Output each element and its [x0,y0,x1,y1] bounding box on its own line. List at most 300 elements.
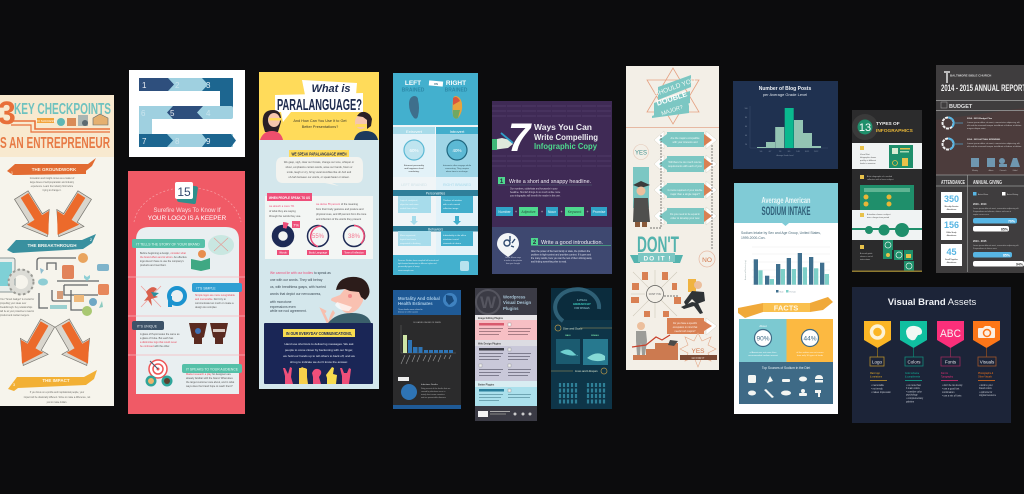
asset: fonts: • use a mix of fonts [942,394,962,398]
lower section: good introduction: than you thought [506,262,521,265]
histogram: 8-9 [788,151,790,153]
column: introvert: Introvert [450,129,465,134]
text: budget: magna aliqua enim [967,128,986,130]
lower section: good introduction: problem is high-context and provides context. If it goes and [531,254,592,256]
question boxes [654,131,717,225]
icons: ministries [971,158,1020,172]
panel: key checkpoints as an entrepreneur [0,95,114,406]
title: key checkpoints: S AN ENTREPRENEUR [0,135,110,152]
asset: colors: & compliments [905,376,921,378]
column labels: RIGHT BRAINED [443,183,471,187]
section: story of your brand: IT TELLS THE STORY OF YOUR BRAND [136,242,200,246]
text block: impact [24,391,91,404]
text block: groundwork: experience. Learn the industry first before [31,185,74,188]
donut: 55% [307,226,329,255]
title [941,71,1024,93]
annual giving bars: 2014 - 2015 [973,240,987,243]
section 2: A list infographic of a ranked [867,175,892,178]
title: BRAINED [445,88,468,94]
donut: 38%: Tone of Inflection [344,251,364,255]
bar chart: sodium intake [744,247,830,293]
question boxes: Do you need to be equal in [670,213,701,216]
asset: fonts: Font & [941,372,948,375]
asset: fonts [937,321,964,398]
fact: 90%: About [759,324,767,328]
text block: breakthrough: will be at your proactive to lead to [0,310,35,313]
lower section: good introduction: 2 [533,240,537,246]
step labels: 9 [206,137,211,146]
stat cards: Worship Service [944,206,959,208]
text block: we cannot lie with our bodies: us, with breathless gasps, with hurried [270,285,326,289]
histogram: 20 [745,144,747,146]
histogram: 40 [745,135,747,137]
title: VS [434,82,438,86]
title [759,86,811,97]
panel: in our everyday communications [264,323,373,384]
annual giving bars: 2013 - 2014 [973,203,987,206]
boxes: personalities [398,196,473,213]
section: it's simple: IT'S SIMPLE [196,286,216,290]
text: budget: 2014 - 2015 Budget Plan [967,117,993,120]
title: key checkpoints [0,95,111,152]
pie chart: Sixty percent of the deaths that are [421,387,450,390]
lower section: good introduction: the many words, here you can the rest of them driving away [531,257,593,260]
step labels: 8 [175,137,180,146]
pie chart: Infectious Deaths [421,383,439,386]
section: better plugins: Better Plugins [478,384,495,386]
header swirl [551,288,612,321]
text block: impact: impact will be drastically different. Strive to make a difference, not [24,396,91,399]
question box: bottom: Do you have a specific [673,322,698,325]
asset: colors: psychology [906,394,918,396]
title: Write Compelling [534,133,598,142]
donut: 7%: 7% [293,222,299,228]
text block: we cannot lie with our bodies: words that depict our nervousness, [270,292,321,296]
section: story of your brand: products and merchant. [140,264,167,267]
text block: we cannot lie with our bodies: with monotone [270,300,292,304]
panel: in our everyday communications: we hold our hands up to tell others to back off, and we [283,354,355,358]
header: Visual Design [503,300,531,305]
text block: we cannot lie with our bodies [270,271,331,313]
asset: visuals: brand colors [979,387,992,390]
stat cards [941,192,962,266]
rings: budget [942,117,963,150]
header swirl: FOR WHALES [574,307,590,310]
annual giving bars: Suspendisse at ultrices eros. [973,247,998,250]
dividers [128,277,245,355]
text block: impact: just to make dollars. [46,401,68,404]
title ribbons: DOUBLE [655,89,688,108]
subtitle: Sodium Intake by Sex and Age Group, United States, [741,231,821,235]
boxes: behaviors [398,231,473,246]
header badge and title: TYPES OF [876,121,900,127]
ribbon: personalities [393,190,478,196]
footer: www.example.com [398,270,414,272]
boxes: personalities: verbal than others [400,207,418,210]
header badge and title: INFOGRAPHICS [876,128,914,134]
question boxes: order to develop your new [671,217,700,220]
formula: headline parts: Adjective [521,210,536,214]
title: BRAINED [402,88,425,94]
header [476,290,531,314]
text block: breakthrough: propelling your ideas over [0,302,27,305]
formula: headline parts: + [541,210,543,214]
heading: attendance and giving [941,180,1002,186]
section: it's unique: a distinctive logo that could never [140,341,177,344]
radial icons [631,270,681,318]
stat cards: Small Together [945,258,958,261]
annual giving bars: 94% [1016,262,1024,266]
histogram: 6-7 [769,151,771,153]
panel: when people speak to us: from their body gestures and posture and [316,207,364,211]
boxes: behaviors: logical and more [400,238,417,241]
section: it's unique: A glass of Pepsi tastes the same as [140,333,180,336]
icon: right brain [452,96,462,119]
stat cards: 350 [944,194,959,204]
yes badge: GO FOR IT [692,357,705,360]
header badge and title [852,114,914,140]
icon: road with buildings: TO SUCCESS [36,119,55,123]
formula: headline parts: Keyword [568,210,581,214]
footer [393,255,478,275]
asset: visuals: Photographs & [978,372,994,375]
asset: colors [900,321,927,404]
subtitle: 1999-2000-Con. [741,236,766,240]
section 2 [860,175,914,210]
flow lines [650,135,712,296]
fact: 44%: of the sodium we eat comes [796,351,825,354]
icon: ok hand pin [497,233,519,257]
histogram: 9-10 [796,151,800,153]
text: budget: elit sed do eiusmod tempor incididunt ut labore et dolore [967,145,1022,148]
histogram: Average Grade Level [777,154,794,157]
step labels: 2 [175,81,180,90]
dashed arch [134,187,241,222]
panel: 13 types of infographics [852,110,922,272]
title ribbons: SHOULD YOU [654,77,697,98]
band 1: quickly at different [860,159,877,162]
step labels [141,81,211,146]
asset: visuals: • stick to your [979,384,993,387]
yes circle and column [633,144,649,208]
text block: breakthrough: breakthrough. Key relationships [0,306,33,309]
arrow: upper right [45,187,98,245]
boxes: behaviors: Individuality is the office [443,234,467,237]
icon: road with buildings [11,114,110,132]
panel: 7 ways infographic copy [492,101,612,274]
panel: chevron process diagram [129,70,245,157]
text block: step 1: Our numbers, odds/stats and keywords in your [510,188,558,190]
question boxes: Is more required of your double [668,189,703,192]
subtitle: And How Can You Use It to Get [293,119,348,123]
formula: headline parts: Promise [593,210,605,214]
step labels: 3 [206,81,211,90]
column: introvert: connecting. They require [445,167,470,170]
illustration: running man [681,279,705,314]
legend: Female [790,291,796,293]
boxes: personalities: with a rich mental [443,203,461,206]
fact: 90%: recommended sodium amount [748,354,778,357]
heading: don't do it: DON'T [637,232,679,257]
title: paralanguage: What is [311,83,351,95]
asset: colors: 3 main colors [906,387,921,390]
asset: colors: • no more than [906,384,922,387]
title: Those deaths were related to [398,308,422,311]
ribbon: the impact: THE IMPACT [42,378,70,383]
panel: in our everyday communications: people to come closer by beckoning with our finger, [285,348,353,352]
lower section: good introduction: and finding something else to read. [531,260,567,264]
donut: 55%: Body Language [309,251,328,255]
step 1 heading: 1 [500,179,504,185]
asset: logo: • memorable [871,384,885,387]
footer [478,411,532,417]
decorative lines [492,106,612,166]
speech bubble text: smile, laugh or cry, bring vocal stumbles like uh-huh and [287,170,352,174]
annual giving bars: Lorem ipsum dolor sit amet, consectetur adipiscing elit [973,207,1019,210]
lower section: good introduction: Write a good introduction. [541,240,603,246]
title [762,196,811,218]
column labels: LEFT BRAINED [401,183,427,187]
title: Number of Blog Posts [759,86,811,92]
boxes: behaviors: inhabitant social [443,238,459,241]
title: Average American [762,196,811,205]
inner panel [136,227,239,394]
text block: we cannot lie with our bodies: one with our words. They will betray [270,278,323,282]
asset: logo [864,321,892,394]
asset: fonts: • don't be too trendy [942,384,963,387]
section: it's unique: a glass of Coke. But each has [140,337,174,340]
section: it speaks to your audience: IT SPEAKS TO YOUR AUDIENCE [186,367,239,371]
boxes: personalities: objective and more [400,203,419,206]
text block: groundwork: Innovation and insight comes as a matter of [30,177,75,180]
donut: 38% [342,226,366,255]
title: per Average Grade Level [763,92,807,97]
arrow: lower left [9,315,62,373]
title: disease or other causes [398,310,418,314]
panel: wordpress visual design plugins [475,288,537,421]
band 3 timeline [852,210,922,240]
diagram: connected pipes and icons [37,253,109,316]
heading: attendance and giving: ATTENDANCE [941,180,965,186]
title [402,80,468,94]
section: it's unique: be confused with the other. [140,345,170,348]
icon: hand gestures [283,367,351,384]
histogram: 10-11 [805,151,809,153]
formula: headline parts: + [560,210,563,214]
fact: 90%: 90% [756,336,770,342]
section: story of your brand [132,235,234,271]
icons: ministries: Global [1013,170,1018,172]
panel: left brained right brained [393,73,478,275]
header: Plugins [503,306,519,311]
no circle: NO [702,257,712,264]
footer: Sources: Studies have compiled left brained and [398,259,439,262]
formula: headline parts: + [586,210,589,214]
lower section: good introduction: Jackie Mason says [505,257,521,259]
question box: bottom: needs both majors? [674,330,696,333]
panel: in our everyday communications: IN OUR EVERYDAY COMMUNICATIONS, [286,331,352,336]
label: we speak paralanguage when [289,150,349,157]
panel: when people speak to us: and inflection of the words they present [316,217,361,221]
column labels [401,183,471,187]
top sources of sodium [739,362,833,404]
speech bubble text [276,157,363,186]
donut: 7%: Words [279,251,287,255]
boxes: personalities: Logical, analytical, [400,199,418,202]
asset: fonts: Typography [941,376,954,378]
text block: breakthrough [0,298,35,317]
panel: dark teal whale comparison [551,288,612,409]
lower section: good introduction: After the power of the best family or state, the problem the [531,250,591,253]
column: extrovert [393,127,435,177]
legend: Male [780,291,784,293]
fact: 44%: 44% [803,336,817,342]
title: LEFT [405,80,421,87]
stat cards: Bible Study [947,231,956,234]
histogram: 7-8 [779,151,781,153]
illustration: curly haired man [322,277,371,323]
asset: fonts: combination [942,391,955,394]
band 1: Visual Stat [860,153,870,156]
annual giving bars [973,192,1024,266]
stat cards: Attendance [947,234,956,237]
boxes: personalities: Thinkers of intuitive [443,199,463,202]
asset: colors: Color scheme [905,372,920,375]
asset: colors: Colors [907,360,921,364]
step labels: 1 [142,81,147,90]
text block: we cannot lie with our bodies: while we nod agreement. [270,309,307,313]
annual giving bars: Actual Giving [1007,193,1018,196]
annual giving bars: sapien cursus arcu [973,213,989,216]
title: key checkpoints: KEY CHECKPOINTS [14,101,111,118]
text block: we cannot lie with our bodies: We cannot lie with our bodies to speak as [270,271,331,275]
subtitle [293,119,348,129]
speech bubble text: shout, emphasize certain words, wave our hands, frown or [285,165,353,169]
heading: don't do it [630,232,683,263]
boxes: behaviors: More organized, [400,234,416,237]
step 1 heading: Write a short and snappy headline. [509,179,591,185]
people pictogram [560,383,604,405]
no circle [699,251,715,267]
column: introvert: 40% [452,148,462,153]
histogram: 80 [745,117,747,119]
question boxes: Will there be too much course [668,161,702,164]
icons: ministries: Ministry [972,169,978,172]
panel: what is paralanguage [259,72,379,389]
panel: when people speak to us: physical cues, and 38 percent from the tone [316,212,367,216]
title: Mortality And Global [398,296,440,301]
yes badge [680,333,717,367]
ribbon: behaviors: Behaviors [428,227,443,231]
panel: annual report [936,65,1024,273]
title: 7 [508,116,532,160]
band: budget: BUDGET [949,104,973,110]
band 3 timeline: A timeline shows a subject [867,213,891,216]
formula: headline parts: Number [498,210,512,214]
question boxes: Are the majors compatible [670,137,700,140]
section: it's simple: communicate too much or create a [195,302,234,305]
section 4 squares [860,240,914,271]
text: budget: Lorem ipsum dolor sit amet, consectetur adipiscing elit [967,142,1020,145]
annual giving bars: Actual Giver [978,193,989,196]
band 1: levels to examine [860,162,876,165]
asset: colors: • complementary [906,397,924,400]
title ribbons [652,75,697,118]
title [398,293,457,314]
column: extrovert: 60% [409,148,419,153]
header swirl: A VISUAL [577,299,588,302]
step labels: 7 [142,137,147,146]
text: budget [967,117,1022,148]
icon: 15 badge: 15 [177,185,191,199]
section: it's unique [132,321,228,348]
icons: food [748,375,823,398]
panel: average american sodium intake [734,183,838,414]
question boxes: major than a single major? [670,193,700,196]
text block: groundwork: large doses of self-preparation and industry [30,181,75,184]
panel: when people speak to us: through the words they use. [269,214,301,218]
section: it's unique: IT'S UNIQUE [137,324,158,328]
section: it speaks to your audience: ways does the brand hope to reach them? [186,385,233,388]
panel: mortality and global health estimates [393,290,461,409]
star lines [647,68,699,124]
footer: right brained tendencies in different styles and [398,262,437,265]
ribbon: the breakthrough [7,234,96,253]
ribbon: the groundwork [7,158,96,175]
footer: personality types of many. [398,265,420,268]
column: introvert: alone time to recharge. [446,170,469,173]
title: RIGHT [446,80,466,87]
column: extrovert: Extrovert personality [404,164,425,167]
text block: breakthrough: product and market mergers. [0,314,30,317]
asset: visuals: • optimize for [979,391,993,394]
yes circle and column: YES [635,150,647,156]
title: logo keeper: YOUR LOGO IS A KEEPER [148,215,227,222]
icon: 15 badge [175,182,198,204]
formula: headline parts: Noun [548,210,556,214]
panel: when people speak to us [265,193,373,259]
column: extrovert: and happiness level [404,168,424,170]
fact: 90%: of Americans eat more than [750,351,777,354]
illustration: man [354,112,378,140]
title: Infographic Copy [534,142,598,151]
text block: groundwork [30,177,75,192]
panel: in our everyday communications: Hand use shortcuts to delivering messages. We ask [285,342,354,346]
asset: fonts: Fonts [945,360,957,364]
asset: logo: Logo [872,360,883,364]
annual giving bars: Suspendisse sed ultricies, ultrices nisl eros at [973,210,1012,213]
band 1 [852,143,922,169]
panel: should you double major [626,66,719,370]
subtitle: Better Presentations? [302,125,338,129]
text block: impact: If you focus on a profile and inspirational people, your [30,391,84,394]
header: Wordpress [503,294,526,300]
asset: logo: • not trendy [871,388,884,390]
text: budget: 2014 - 2015 ACTUAL SPENDING [967,138,1000,141]
section: it's simple: design too complex. [195,306,218,309]
title ribbons: MAJOR? [661,105,684,117]
section: story of your brand: the brand offers and to whom. An effective [140,256,187,259]
asset: visuals [973,321,1000,397]
asset: fonts: • use a good font [942,388,960,390]
age heading: Lives and Lifespan [575,370,598,373]
section: web design plugins: Web Design Plugins [478,342,502,346]
panel: when people speak to us: we absorb a mere 7% [269,204,295,208]
histogram: 60 [745,126,747,128]
snake band [139,78,236,147]
yes badge: YES [691,348,705,355]
text: budget: Lorem ipsum dolor sit amet, consectetur adipiscing elit [967,121,1020,124]
